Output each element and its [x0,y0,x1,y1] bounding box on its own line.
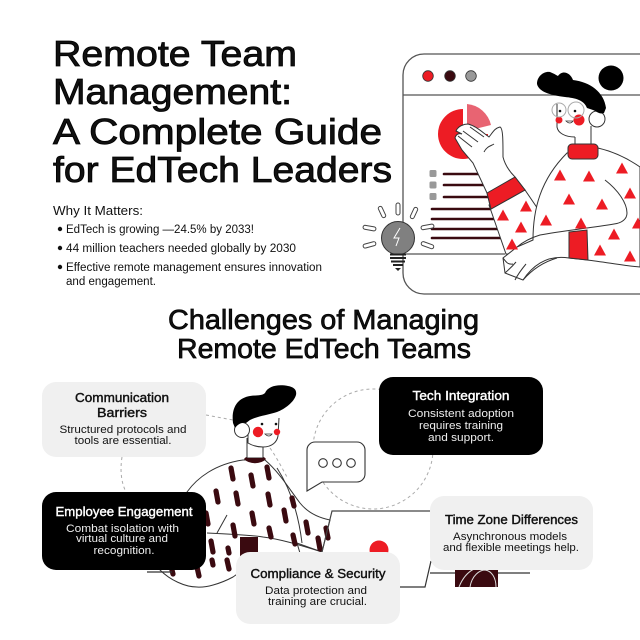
glasses [552,102,584,118]
neck and collar [247,438,263,458]
card: compliance and security [236,552,400,624]
card: time zone differences: Asynchronous models [453,531,568,543]
triangles pattern [497,162,640,262]
card: communication barriers: Barriers [97,406,147,420]
illustration: browser window with presenter [403,54,640,294]
illustration: seated man with laptop [147,385,530,587]
man's body [150,460,330,587]
card: employee engagement: Employee Engagement [56,505,193,519]
title: for EdTech Leaders [53,149,392,190]
neck and collar [575,126,591,146]
hair [233,385,296,428]
face [557,100,592,137]
forearm outline [517,180,627,247]
card: tech integration: and support. [428,432,494,444]
browser window frame [403,54,640,294]
card: tech integration [379,377,543,455]
presenter sleeve [489,190,542,254]
face [248,412,279,447]
text block: why it matters: Why It Matters: [53,204,143,218]
window dots [423,71,476,81]
laptop [322,511,430,552]
title: A Complete Guide [53,111,382,152]
card: time zone differences: and flexible meetings help. [443,542,579,554]
card: employee engagement: virtual culture and [76,533,168,545]
sleeve cuff [487,177,525,209]
sweater dashes [171,467,328,576]
pie chart [438,104,491,159]
card: compliance and security: Compliance & Security [250,567,386,581]
list bullets [430,170,436,200]
text block: why it matters [53,204,322,288]
heading: challenges: Challenges of Managing [168,304,479,335]
dashed connectors [121,389,433,509]
heading: challenges [168,304,479,364]
card: tech integration: requires training [419,420,503,432]
icon: light bulb [363,203,434,271]
card: employee engagement [42,492,206,570]
fingers [503,258,557,280]
text block: why it matters: and engagement. [66,276,156,288]
card: communication barriers: Communication [75,391,169,405]
card: employee engagement: recognition. [94,545,154,557]
card: employee engagement: Combat isolation with [66,523,179,535]
title: Management: [53,71,292,112]
card: time zone differences [430,496,593,570]
hair and bun [537,72,606,114]
speech bubble [307,442,365,491]
text block: why it matters: Effective remote management ensures innovation [66,262,322,274]
maroon block under desk [455,569,498,587]
card: communication barriers: Structured protocols and [60,424,186,436]
text block: why it matters: 44 million teachers needed globally by 2030 [66,243,296,255]
card: communication barriers [42,382,206,457]
presenter raised arm and hand [455,124,525,209]
card: time zone differences: Time Zone Differences [445,513,578,527]
title: Remote Team [53,33,297,74]
sweater panel [569,230,588,260]
presenter body [503,148,640,280]
desk line [147,561,530,587]
heading: challenges: Remote EdTech Teams [177,333,471,364]
card: communication barriers: tools are essential. [74,435,172,447]
card: tech integration: Consistent adoption [408,408,514,420]
list lines [432,174,500,238]
card: compliance and security: training are crucial. [268,596,367,608]
card: tech integration: Tech Integration [412,389,510,403]
text block: why it matters: EdTech is growing —24.5% by 2033! [66,224,254,236]
card: compliance and security: Data protection and [265,585,367,597]
maroon seat block [240,537,258,557]
title [53,33,392,190]
